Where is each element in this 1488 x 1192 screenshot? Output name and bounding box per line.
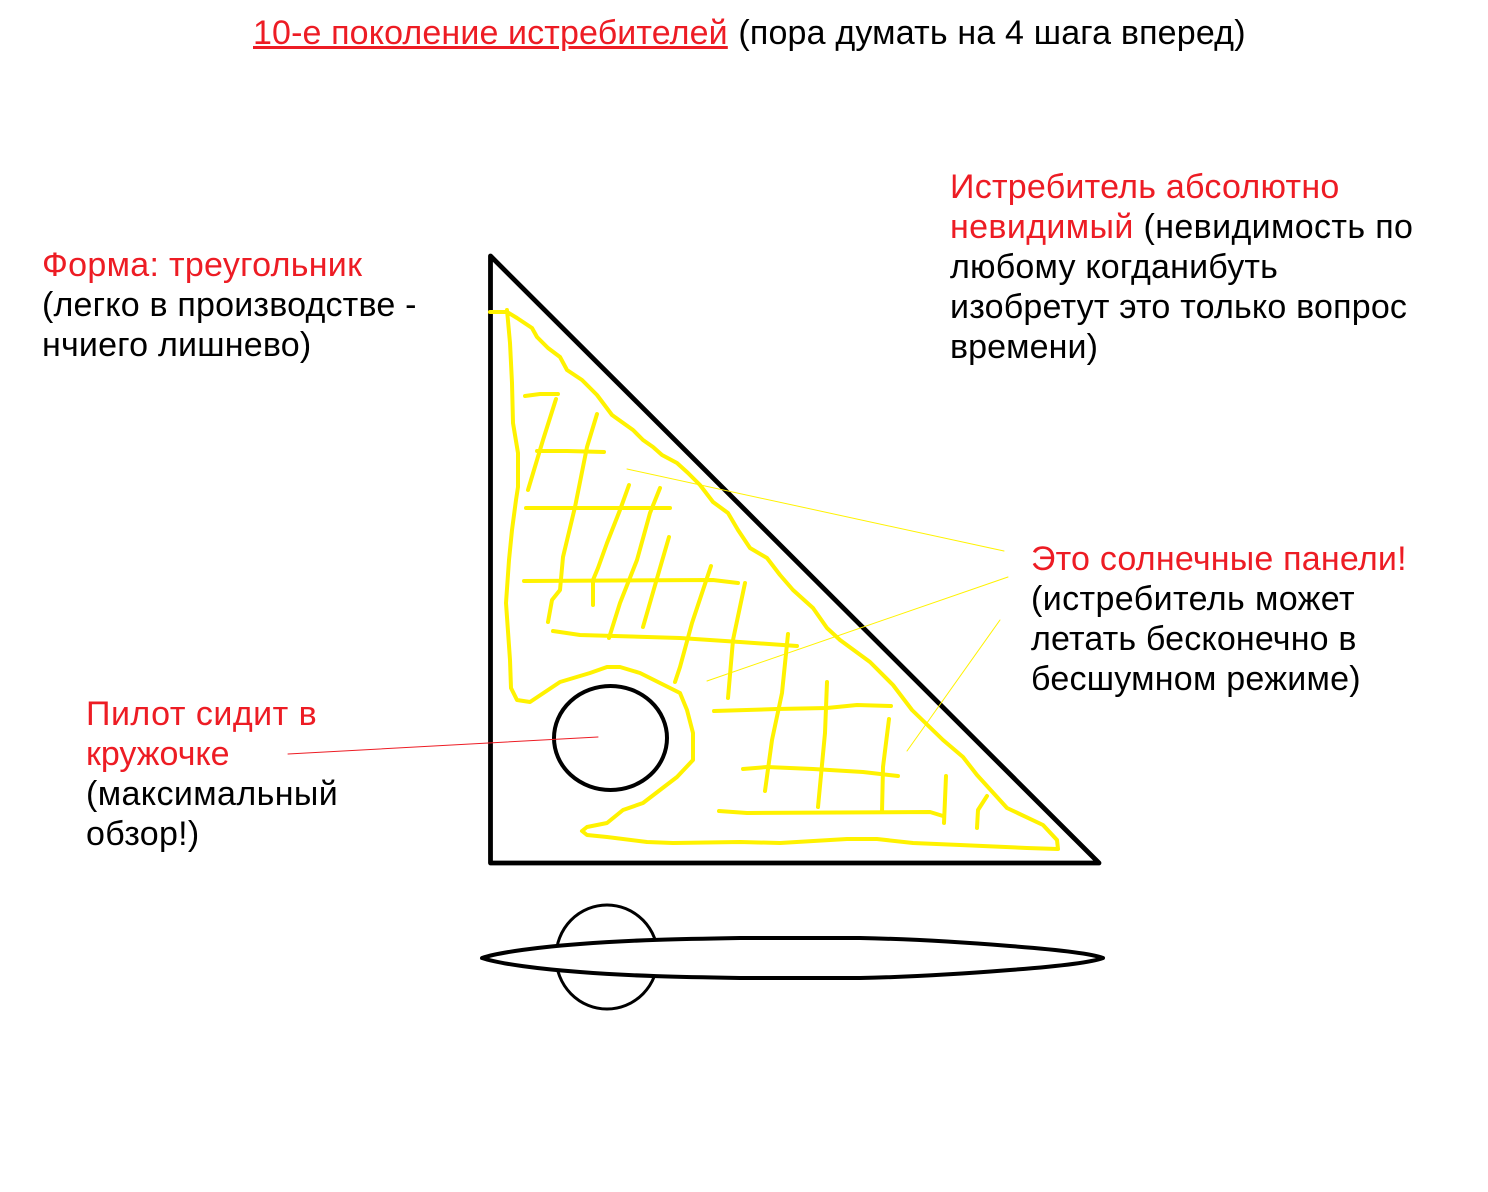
text block: solar panels [1031,540,1407,698]
text block: pilot: (максимальный [86,775,338,813]
text block: shape: нчиего лишнево) [42,326,311,364]
text block: invisibility: изобретут это только вопрос [950,288,1407,326]
text block: pilot: обзор!) [86,815,200,853]
text block: shape: (легко в производстве - [42,286,417,324]
text block: solar panels: летать бесконечно в [1031,620,1357,658]
text block: shape: Форма: треугольник [42,246,362,284]
side view cockpit circle [556,905,658,1009]
solar panel outline [490,310,1058,849]
pilot pointer line [288,737,598,754]
text block: invisibility: Истребитель абсолютно [950,168,1340,206]
solar panel pointer lines [627,469,1008,751]
text block: pilot: кружочке [86,735,230,773]
text block: invisibility: времени) [950,328,1098,366]
side view fuselage lens [482,938,1103,978]
title: 10-е поколение истребителей (пора думать на 4 шага вперед) [253,14,1246,52]
text block: invisibility: любому когданибуть [950,248,1278,286]
text block: invisibility: невидимый (невидимость по [950,208,1413,246]
text block: shape [42,246,417,364]
pilot ellipse top view [554,686,667,790]
text block: solar panels: (истребитель может [1031,580,1355,618]
text block: invisibility [950,168,1413,366]
triangle fuselage top view [490,256,1099,863]
text block: solar panels: Это солнечные панели! [1031,540,1407,578]
solar panel grid lines [524,394,987,828]
text block: solar panels: бесшумном режиме) [1031,660,1361,698]
text block: pilot [86,695,338,853]
text block: pilot: Пилот сидит в [86,695,317,733]
